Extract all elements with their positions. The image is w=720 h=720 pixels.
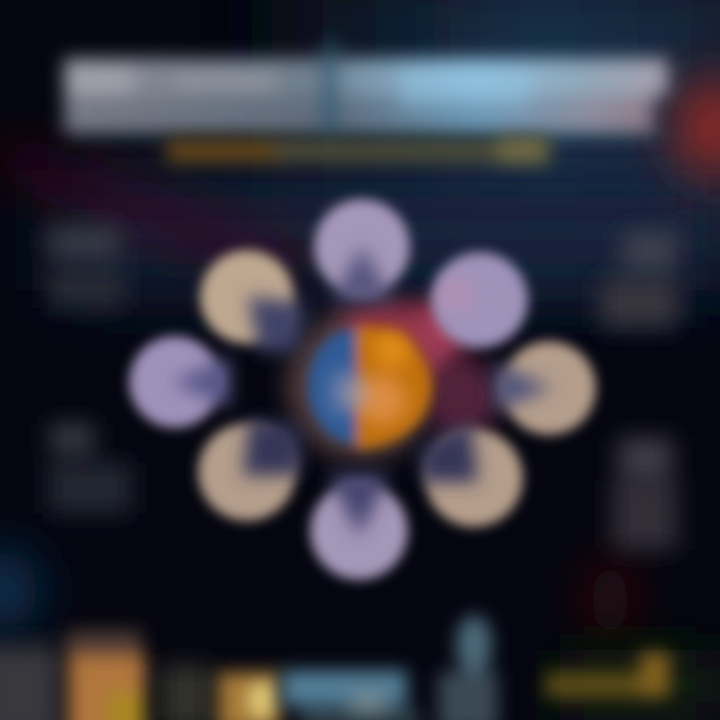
right text block lower (612, 438, 678, 550)
circle node: bottom (310, 474, 408, 580)
circle node: right (494, 341, 596, 435)
bottom strip: dark middle block (160, 665, 212, 720)
bottom strip: orange column (66, 630, 146, 720)
bottom strip: teal panel (282, 670, 420, 720)
globe (308, 325, 432, 449)
hub halo (286, 302, 498, 461)
tower shape (438, 615, 498, 720)
circle node: upper right (432, 252, 528, 348)
circle node: upper left (200, 250, 306, 354)
circle node: left (129, 336, 230, 428)
title (64, 40, 668, 140)
circle node: lower right (420, 420, 523, 527)
yellow curved emblem (545, 652, 670, 698)
circle node: lower left (198, 418, 302, 521)
right text block upper (600, 232, 678, 328)
subtitle (166, 136, 550, 164)
bottom strip: golden column (218, 672, 280, 720)
bottom strip: grey block (0, 645, 60, 720)
left text block lower (48, 424, 132, 514)
left text block upper (48, 228, 124, 308)
circle node: top (314, 199, 410, 300)
